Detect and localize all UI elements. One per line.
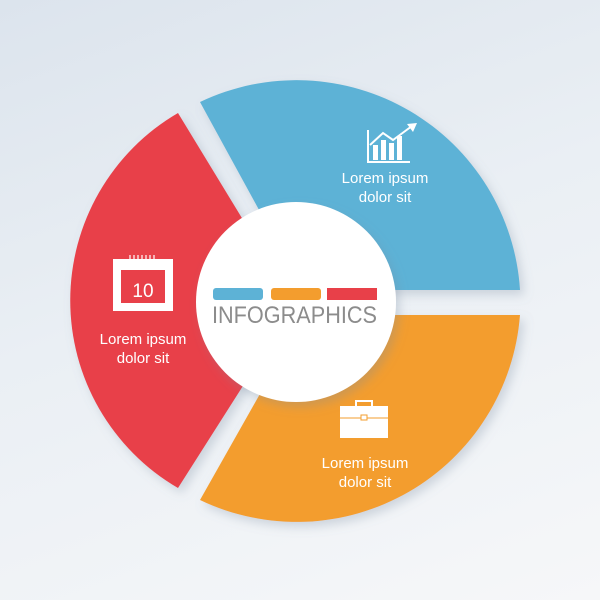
panel: blue segment	[200, 80, 520, 290]
panel: red segment	[70, 113, 248, 488]
text: blue: Lorem ipsum	[342, 170, 428, 187]
bars	[213, 288, 263, 300]
title: INFOGRAPHICS	[212, 302, 377, 329]
icon: chart	[368, 123, 417, 162]
icon: briefcase	[340, 401, 388, 438]
text: orange: Lorem ipsum	[322, 455, 408, 472]
panel: red segment: dolor sit	[117, 350, 170, 367]
panel: orange segment	[200, 315, 520, 522]
panel: blue segment: dolor sit	[359, 189, 412, 206]
center circle	[196, 202, 396, 402]
icon: calendar: 10	[132, 281, 154, 302]
text: red: Lorem ipsum	[100, 331, 186, 348]
icon: calendar	[113, 255, 173, 311]
panel: orange segment: dolor sit	[339, 474, 392, 491]
